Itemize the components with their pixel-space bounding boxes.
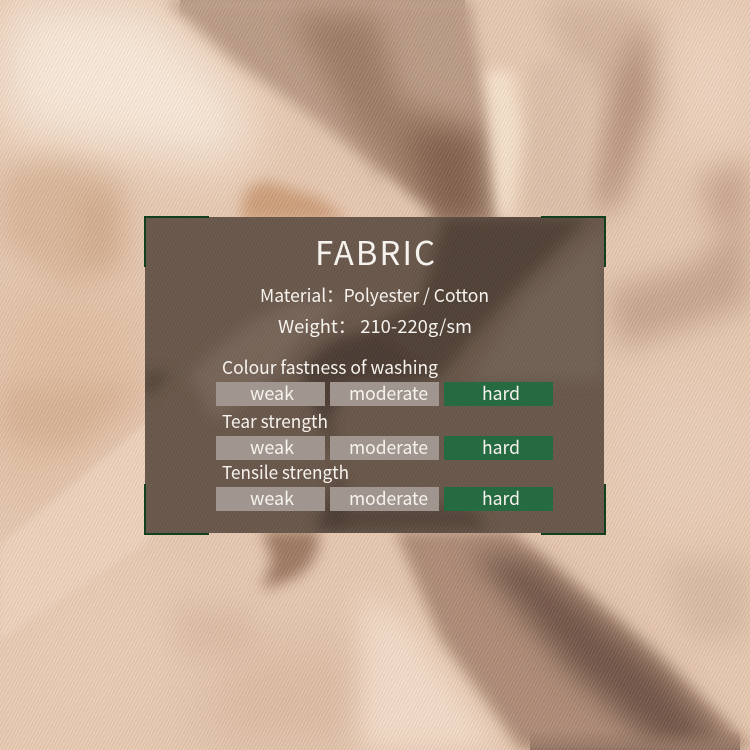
option: moderate: moderate xyxy=(349,485,428,511)
title: FABRIC xyxy=(315,227,435,275)
panel background xyxy=(145,217,604,533)
fold: top centre shadow xyxy=(165,0,500,225)
option: hard, selected xyxy=(444,380,553,406)
option: hard, selected xyxy=(444,434,553,460)
corner bracket: bottom left xyxy=(145,484,209,534)
rating row: tensile strength xyxy=(216,459,553,511)
option: moderate: moderate xyxy=(349,380,428,406)
rating row: colour fastness of washing xyxy=(216,354,553,406)
option: weak xyxy=(216,434,325,460)
option: hard, selected xyxy=(444,485,553,511)
option: weak xyxy=(216,380,325,406)
option: weak: weak xyxy=(250,485,294,511)
corner bracket: bottom right xyxy=(541,484,605,534)
option: moderate: moderate xyxy=(349,434,428,460)
row label: Colour fastness of washing xyxy=(222,354,438,380)
weight line: Weight： 210-220g/sm xyxy=(278,313,472,339)
option: hard, selected: hard xyxy=(482,434,520,460)
option: weak xyxy=(216,485,325,511)
fabric fold edge lower left xyxy=(0,422,150,640)
swirl of fabric seen through panel xyxy=(145,217,604,533)
panel: translucent fabric specification card xyxy=(145,217,605,534)
orange tan band above panel xyxy=(240,180,350,222)
material line: Material：Polyester / Cotton xyxy=(260,282,489,308)
option: weak: weak xyxy=(250,380,294,406)
light streak between folds xyxy=(375,60,590,225)
option: weak: weak xyxy=(250,434,294,460)
row label: Tensile strength xyxy=(222,459,349,485)
dark curved spot below panel xyxy=(262,530,318,590)
rating row: tear strength xyxy=(216,408,553,460)
large shadow band lower right xyxy=(395,530,750,750)
corner bracket: top left xyxy=(145,217,209,267)
option: hard, selected: hard xyxy=(482,485,520,511)
option: hard, selected: hard xyxy=(482,380,520,406)
corner bracket: top right xyxy=(541,217,605,267)
row label: Tear strength xyxy=(222,408,328,434)
